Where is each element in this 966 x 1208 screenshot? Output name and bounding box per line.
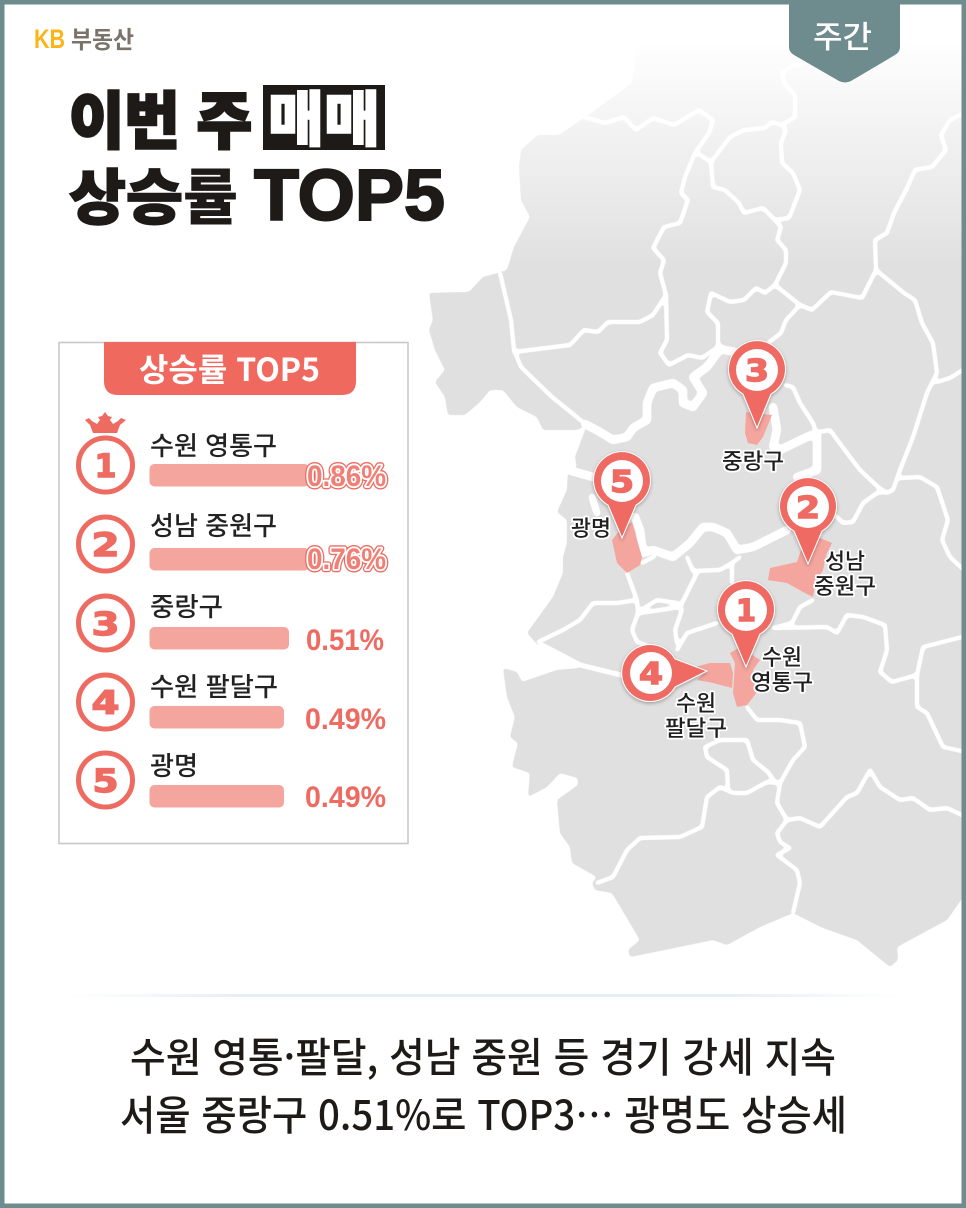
map pin 3 (729, 341, 786, 428)
map label: 수원 영통구: 영통구 (751, 665, 813, 697)
highlighted district: 중랑구 (745, 412, 772, 445)
map pin 2: 2 (796, 491, 820, 526)
row 1 (78, 426, 386, 493)
map pin 1 (718, 581, 774, 667)
map label: 광명: 광명 (571, 511, 611, 543)
title: 률 (183, 150, 238, 237)
row 5: 광명 (150, 746, 198, 783)
value 0.76%: 0.76% (307, 543, 386, 576)
logo: KB 부동산: KB (34, 24, 65, 54)
map label: 성남 중원구: 성남 (825, 544, 865, 576)
logo: KB 부동산 (34, 20, 134, 55)
map pin 1: 1 (736, 594, 756, 629)
map label: 수원 영통구: 수원 (762, 640, 802, 672)
title: 매매 (268, 72, 380, 159)
row 1: 1 (94, 447, 116, 485)
title: TOP5 (254, 156, 445, 236)
map pin 5 (594, 452, 650, 538)
highlighted district: 성남 중원구 (768, 538, 832, 597)
title (69, 71, 445, 237)
value 0.86%: 0.86% (307, 460, 386, 493)
row 5 (78, 746, 386, 814)
thick river lines (540, 349, 817, 676)
badge: 주간: 주간 (813, 12, 872, 57)
row 3: 0.51% (306, 624, 384, 657)
row 4 (78, 667, 386, 736)
bottom summary text (120, 1024, 847, 1142)
district boundary lines (500, 65, 966, 913)
logo: KB 부동산: 부동산 (71, 20, 134, 55)
bottom summary text: 수원 영통·팔달, 성남 중원 등 경기 강세 지속 (130, 1024, 836, 1084)
map label: 수원 팔달구: 팔달구 (665, 711, 727, 743)
row 2: 성남 중원구 (150, 506, 277, 543)
map pin 5: 5 (610, 465, 634, 500)
row 4: 수원 팔달구 (150, 667, 278, 704)
panel header (104, 342, 356, 395)
highlighted district: 수원 팔달구 (695, 663, 733, 688)
row 4: 0.49% (305, 703, 386, 736)
badge: 주간 (789, 4, 900, 82)
row 3 (78, 587, 384, 657)
value 0.76%: 0.76% (307, 543, 386, 576)
row 5: 0.49% (305, 781, 386, 814)
row 2 (78, 506, 386, 576)
row 2: 2 (92, 526, 120, 564)
map label: 중랑구: 중랑구 (722, 444, 784, 476)
map label: 수원 팔달구 (665, 686, 727, 743)
row 3: 중랑구 (150, 587, 223, 624)
row 4: 4 (92, 684, 120, 722)
map label: 수원 영통구 (751, 640, 813, 697)
panel header: 상승률 TOP5 (139, 345, 320, 391)
title: 이번 주 (69, 71, 252, 161)
map label: 성남 중원구: 중원구 (814, 569, 876, 601)
row 5: 5 (92, 762, 118, 800)
map pin 4: 4 (639, 657, 663, 692)
highlighted district: 광명 (612, 522, 642, 573)
value 0.86%: 0.86% (307, 460, 386, 493)
row 3: 3 (92, 605, 120, 643)
map pin 3: 3 (745, 354, 769, 389)
title: 상승 (69, 150, 183, 237)
row 1: 수원 영통구 (150, 426, 277, 463)
map pin 4 (622, 645, 707, 702)
panel: 상승률 TOP5 ranking (59, 342, 408, 844)
map pin 2 (780, 478, 836, 564)
icon: crown (85, 412, 126, 433)
map of the capital region (429, 0, 966, 967)
bottom summary text: 서울 중랑구 0.51%로 TOP3⋯ 광명도 상승세 (120, 1082, 847, 1142)
map label: 성남 중원구 (814, 544, 876, 601)
highlighted district: 수원 영통구 (730, 647, 760, 707)
map label: 수원 팔달구: 수원 (676, 686, 716, 718)
